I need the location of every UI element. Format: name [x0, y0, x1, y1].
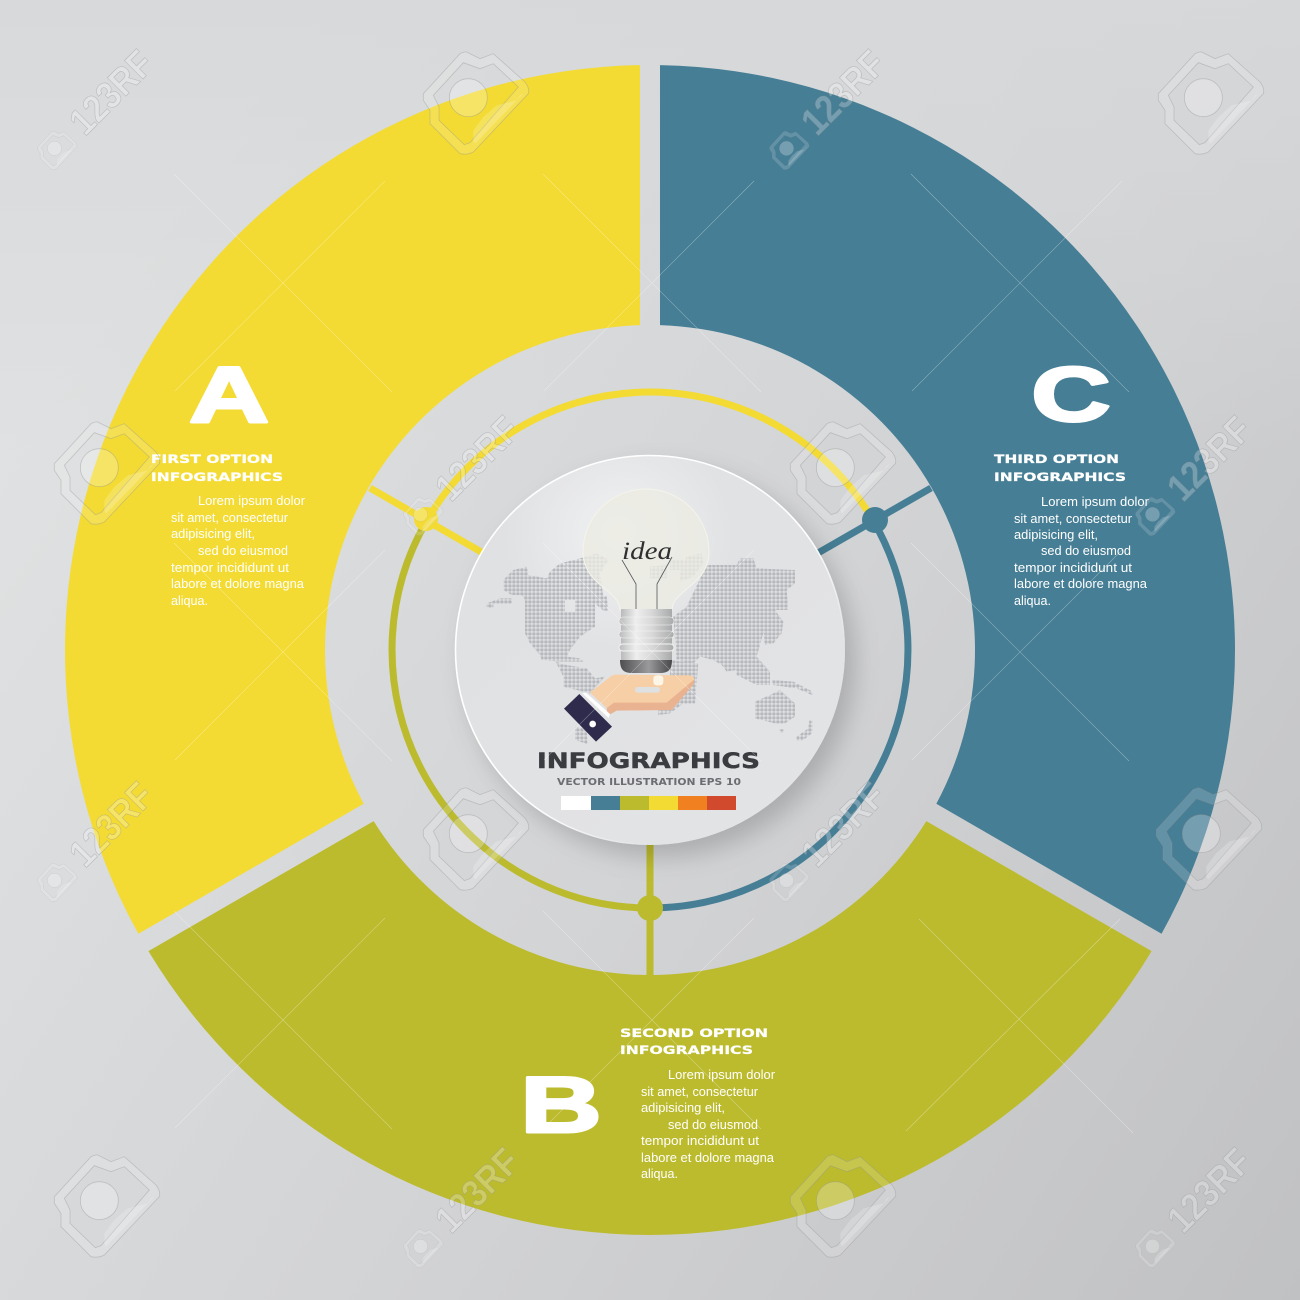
panel: segment C (teal) — [660, 65, 1235, 934]
text block: option C — [1014, 495, 1149, 608]
panel: segment B (olive) — [148, 821, 1152, 1235]
letter B: B — [520, 1060, 602, 1149]
text block: option B: sed do eiusmod — [668, 1118, 758, 1132]
text block: option B: adipisicing elit, — [641, 1101, 725, 1115]
text block: option C: tempor incididunt ut — [1014, 561, 1133, 575]
watermark logos: 123RF — [62, 775, 162, 875]
center subtitle: VECTOR ILLUSTRATION EPS 10 — [557, 777, 741, 788]
watermark logos: 123RF — [62, 43, 162, 143]
text block: option A: sed do eiusmod — [198, 544, 288, 558]
text block: option A: labore et dolore magna — [171, 577, 304, 591]
heading: third option: INFOGRAPHICS — [994, 470, 1126, 484]
heading: first option — [151, 452, 283, 484]
text block: option C: labore et dolore magna — [1014, 577, 1147, 591]
text block: option C: sit amet, consectetur — [1014, 512, 1132, 526]
text block: option A: adipisicing elit, — [171, 527, 255, 541]
watermark logos: 123RF — [1160, 1141, 1260, 1241]
text block: option C: aliqua. — [1014, 594, 1051, 608]
idea label: idea — [622, 538, 672, 565]
text block: option A: Lorem ipsum dolor — [198, 494, 305, 508]
watermark logos: 123RF — [794, 43, 894, 143]
heading: second option: INFOGRAPHICS — [620, 1043, 753, 1057]
text block: option C: adipisicing elit, — [1014, 528, 1098, 542]
watermark logos: 123RF — [794, 775, 894, 875]
letter A: A — [189, 351, 269, 439]
watermark logos: 123RF — [428, 1141, 528, 1241]
text block: option B — [641, 1068, 775, 1181]
center disc — [455, 455, 845, 845]
text block: option B: Lorem ipsum dolor — [668, 1068, 775, 1082]
text block: option C: sed do eiusmod — [1041, 544, 1131, 558]
text block: option B: sit amet, consectetur — [641, 1085, 758, 1099]
center title: INFOGRAPHICS — [537, 749, 760, 773]
text block: option A: tempor incididunt ut — [171, 561, 290, 575]
icon: hand holding bulb — [564, 675, 694, 742]
heading: third option — [994, 452, 1126, 484]
text block: option A: sit amet, consectetur — [171, 511, 288, 525]
icon: light bulb — [583, 489, 709, 673]
colour bar — [561, 796, 736, 810]
heading: first option: FIRST OPTION — [151, 452, 273, 466]
text block: option A — [171, 494, 305, 608]
text block: option B: aliqua. — [641, 1167, 678, 1181]
text block: option A: aliqua. — [171, 594, 208, 608]
connector ring with spokes and nodes — [370, 392, 931, 975]
heading: first option: INFOGRAPHICS — [151, 470, 283, 484]
text block: option C: Lorem ipsum dolor — [1041, 495, 1149, 509]
letter C: C — [1032, 352, 1110, 438]
heading: second option — [620, 1026, 768, 1057]
panel: segment A (yellow) — [65, 65, 640, 934]
heading: second option: SECOND OPTION — [620, 1026, 768, 1040]
watermark logos: 123RF — [428, 409, 528, 509]
watermark logos: 123RF — [1160, 409, 1260, 509]
heading: third option: THIRD OPTION — [994, 452, 1119, 466]
text block: option B: labore et dolore magna — [641, 1151, 774, 1165]
text block: option B: tempor incididunt ut — [641, 1134, 760, 1148]
dotted world map — [486, 554, 812, 744]
